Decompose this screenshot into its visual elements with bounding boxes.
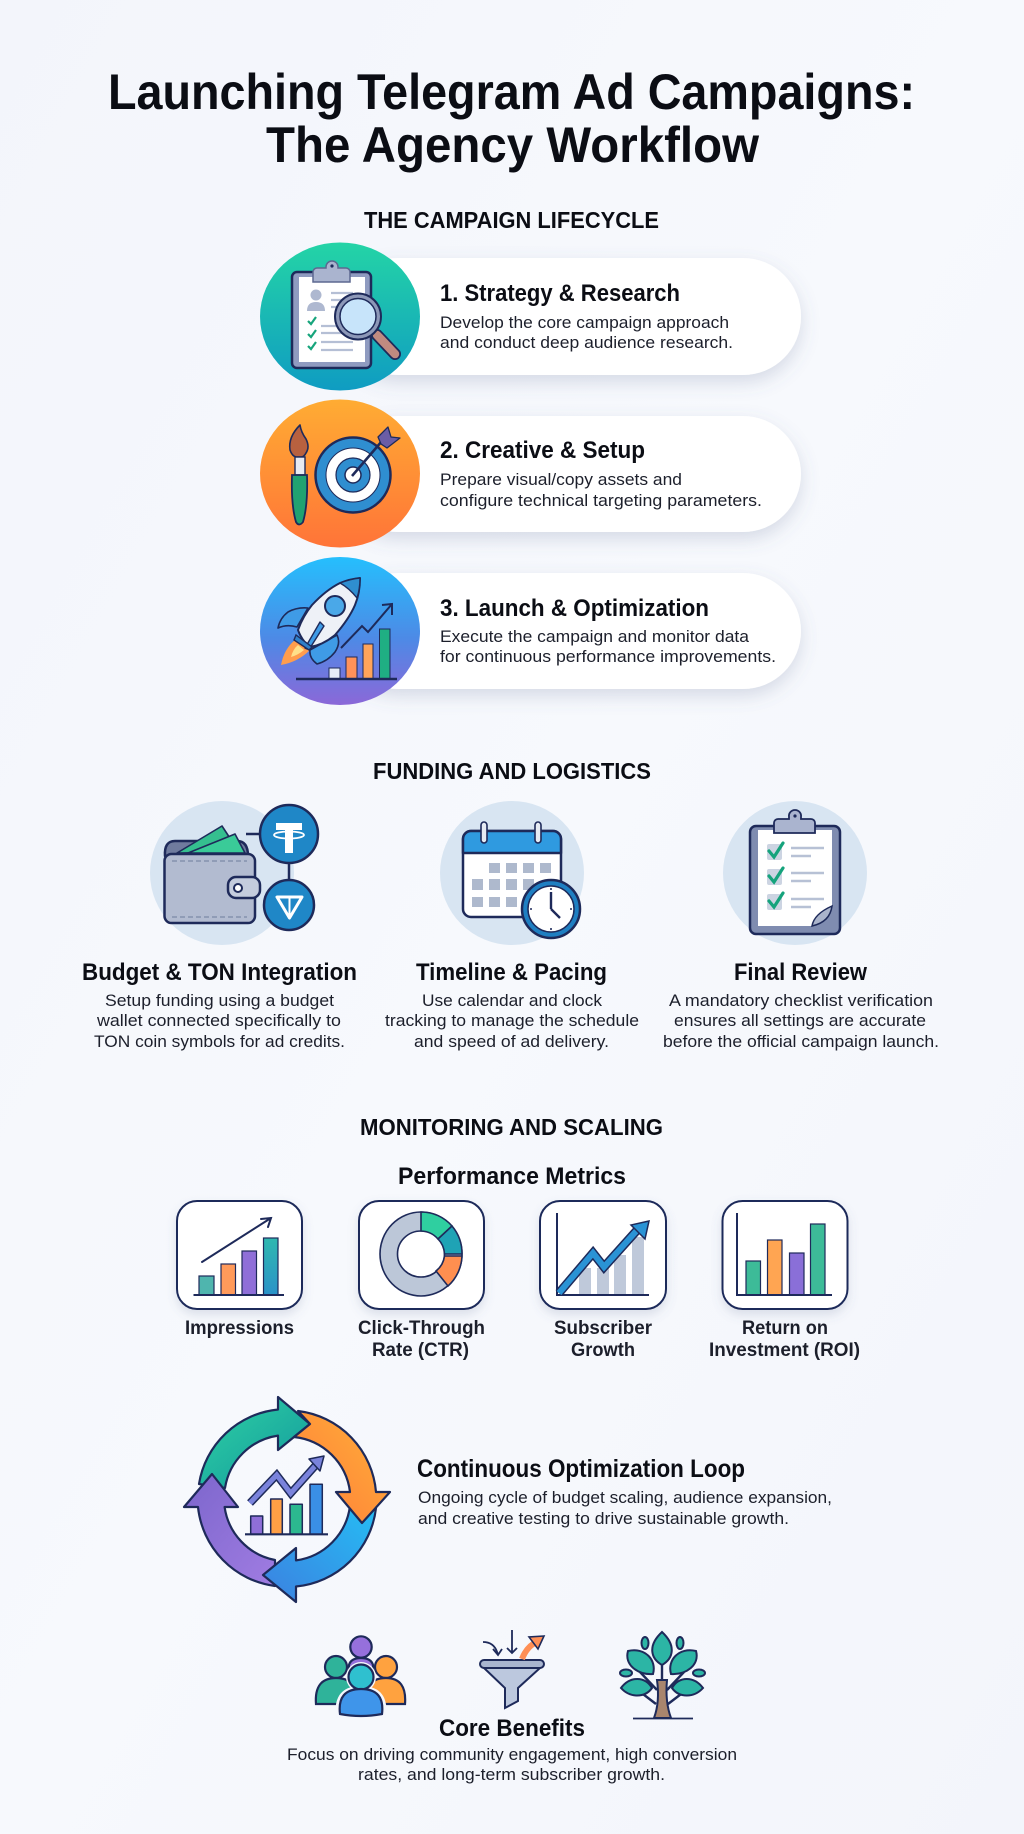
loop center chart — [245, 1456, 328, 1534]
step 3 description: Execute the campaign and monitor data — [440, 627, 750, 646]
step 3 title: 3. Launch & Optimization — [440, 595, 709, 622]
subscriber growth label — [554, 1317, 652, 1361]
ROI label: Return on — [742, 1317, 828, 1339]
panel: step 1 strategy and research — [260, 242, 801, 390]
title: The Agency Workflow — [266, 117, 759, 173]
step 1 description: and conduct deep audience research. — [440, 333, 733, 352]
heading: the campaign lifecycle: THE CAMPAIGN LIFECYCLE — [364, 207, 659, 233]
step 1 description: Develop the core campaign approach — [440, 313, 729, 332]
icon: rising bar chart — [296, 604, 397, 679]
step 3 description — [440, 627, 776, 666]
text block: continuous optimization loop: Continuous Optimization Loop — [417, 1455, 745, 1483]
text block: core benefits: rates, and long-term subscriber growth. — [358, 1765, 665, 1784]
timeline description: and speed of ad delivery. — [414, 1032, 609, 1051]
icon: target with arrow — [316, 427, 400, 512]
panel: step 3 launch and optimization — [260, 557, 801, 705]
icon: continuous optimization loop — [184, 1397, 390, 1602]
text block: core benefits: Core Benefits — [439, 1715, 585, 1742]
icon: checklist clipboard — [750, 810, 840, 934]
final review description: ensures all settings are accurate — [674, 1011, 926, 1030]
CTR label: Rate (CTR) — [372, 1339, 469, 1361]
final review description — [663, 991, 939, 1051]
timeline description: Use calendar and clock — [422, 991, 602, 1010]
step 2 description: configure technical targeting parameters. — [440, 491, 762, 510]
chart: ROI bars — [737, 1213, 832, 1295]
icon: paint brush — [290, 425, 308, 524]
panel: return on investment metric — [709, 1201, 860, 1361]
budget title: Budget & TON Integration — [82, 959, 357, 986]
timeline description — [385, 991, 639, 1051]
step 1 title: 1. Strategy & Research — [440, 280, 680, 307]
final review description: before the official campaign launch. — [663, 1032, 939, 1051]
panel: subscriber growth metric — [540, 1201, 666, 1361]
text block: core benefits — [287, 1715, 737, 1784]
panel: click-through rate metric — [358, 1201, 485, 1361]
step 2 description — [440, 470, 762, 510]
subscriber growth label: Growth — [571, 1339, 635, 1361]
step 2 description: Prepare visual/copy assets and — [440, 470, 682, 489]
CTR label — [358, 1317, 485, 1361]
subheading: performance metrics: Performance Metrics — [398, 1163, 626, 1190]
chart: CTR donut — [380, 1212, 462, 1296]
icon: rocket — [278, 578, 360, 665]
panel: step 2 creative and setup — [260, 400, 801, 548]
step 1 description — [440, 313, 733, 352]
timeline title: Timeline & Pacing — [416, 959, 607, 986]
chart: subscriber growth — [557, 1213, 649, 1295]
icon: growth tree — [620, 1632, 705, 1718]
panel: timeline and pacing — [385, 801, 639, 1051]
icon: community people — [316, 1636, 405, 1718]
timeline description: tracking to manage the schedule — [385, 1011, 639, 1030]
subscriber growth label: Subscriber — [554, 1317, 652, 1339]
panel: impressions metric — [177, 1201, 302, 1339]
CTR label: Click-Through — [358, 1317, 485, 1339]
text block: core benefits: Focus on driving community engagement, high conversion — [287, 1745, 737, 1764]
icon: calendar with clock — [463, 822, 580, 938]
ROI label: Investment (ROI) — [709, 1339, 860, 1361]
final review description: A mandatory checklist verification — [669, 991, 933, 1010]
panel: final review — [663, 801, 939, 1051]
impressions label: Impressions — [185, 1317, 294, 1339]
final review title: Final Review — [734, 959, 867, 986]
title — [108, 64, 915, 173]
step 3 description: for continuous performance improvements. — [440, 647, 776, 666]
heading: funding and logistics: FUNDING AND LOGISTICS — [373, 758, 651, 784]
budget description: TON coin symbols for ad credits. — [94, 1032, 345, 1051]
step 2 title: 2. Creative & Setup — [440, 437, 645, 464]
icon: wallet with coins — [164, 805, 318, 930]
text block: continuous optimization loop — [417, 1455, 832, 1528]
icon: clipboard with magnifier — [292, 261, 395, 368]
panel: budget and TON integration — [82, 801, 357, 1051]
text block: continuous optimization loop: Ongoing cycle of budget scaling, audience expansion, — [418, 1488, 832, 1507]
ROI label — [709, 1317, 860, 1361]
chart: impressions bars — [194, 1218, 284, 1295]
budget description — [94, 991, 345, 1051]
budget description: Setup funding using a budget — [105, 991, 334, 1010]
budget description: wallet connected specifically to — [96, 1011, 341, 1030]
text block: continuous optimization loop: and creative testing to drive sustainable growth. — [418, 1509, 789, 1528]
heading: monitoring and scaling: MONITORING AND SCALING — [360, 1114, 663, 1140]
icon: conversion funnel — [480, 1630, 544, 1708]
title: Launching Telegram Ad Campaigns: — [108, 64, 915, 120]
